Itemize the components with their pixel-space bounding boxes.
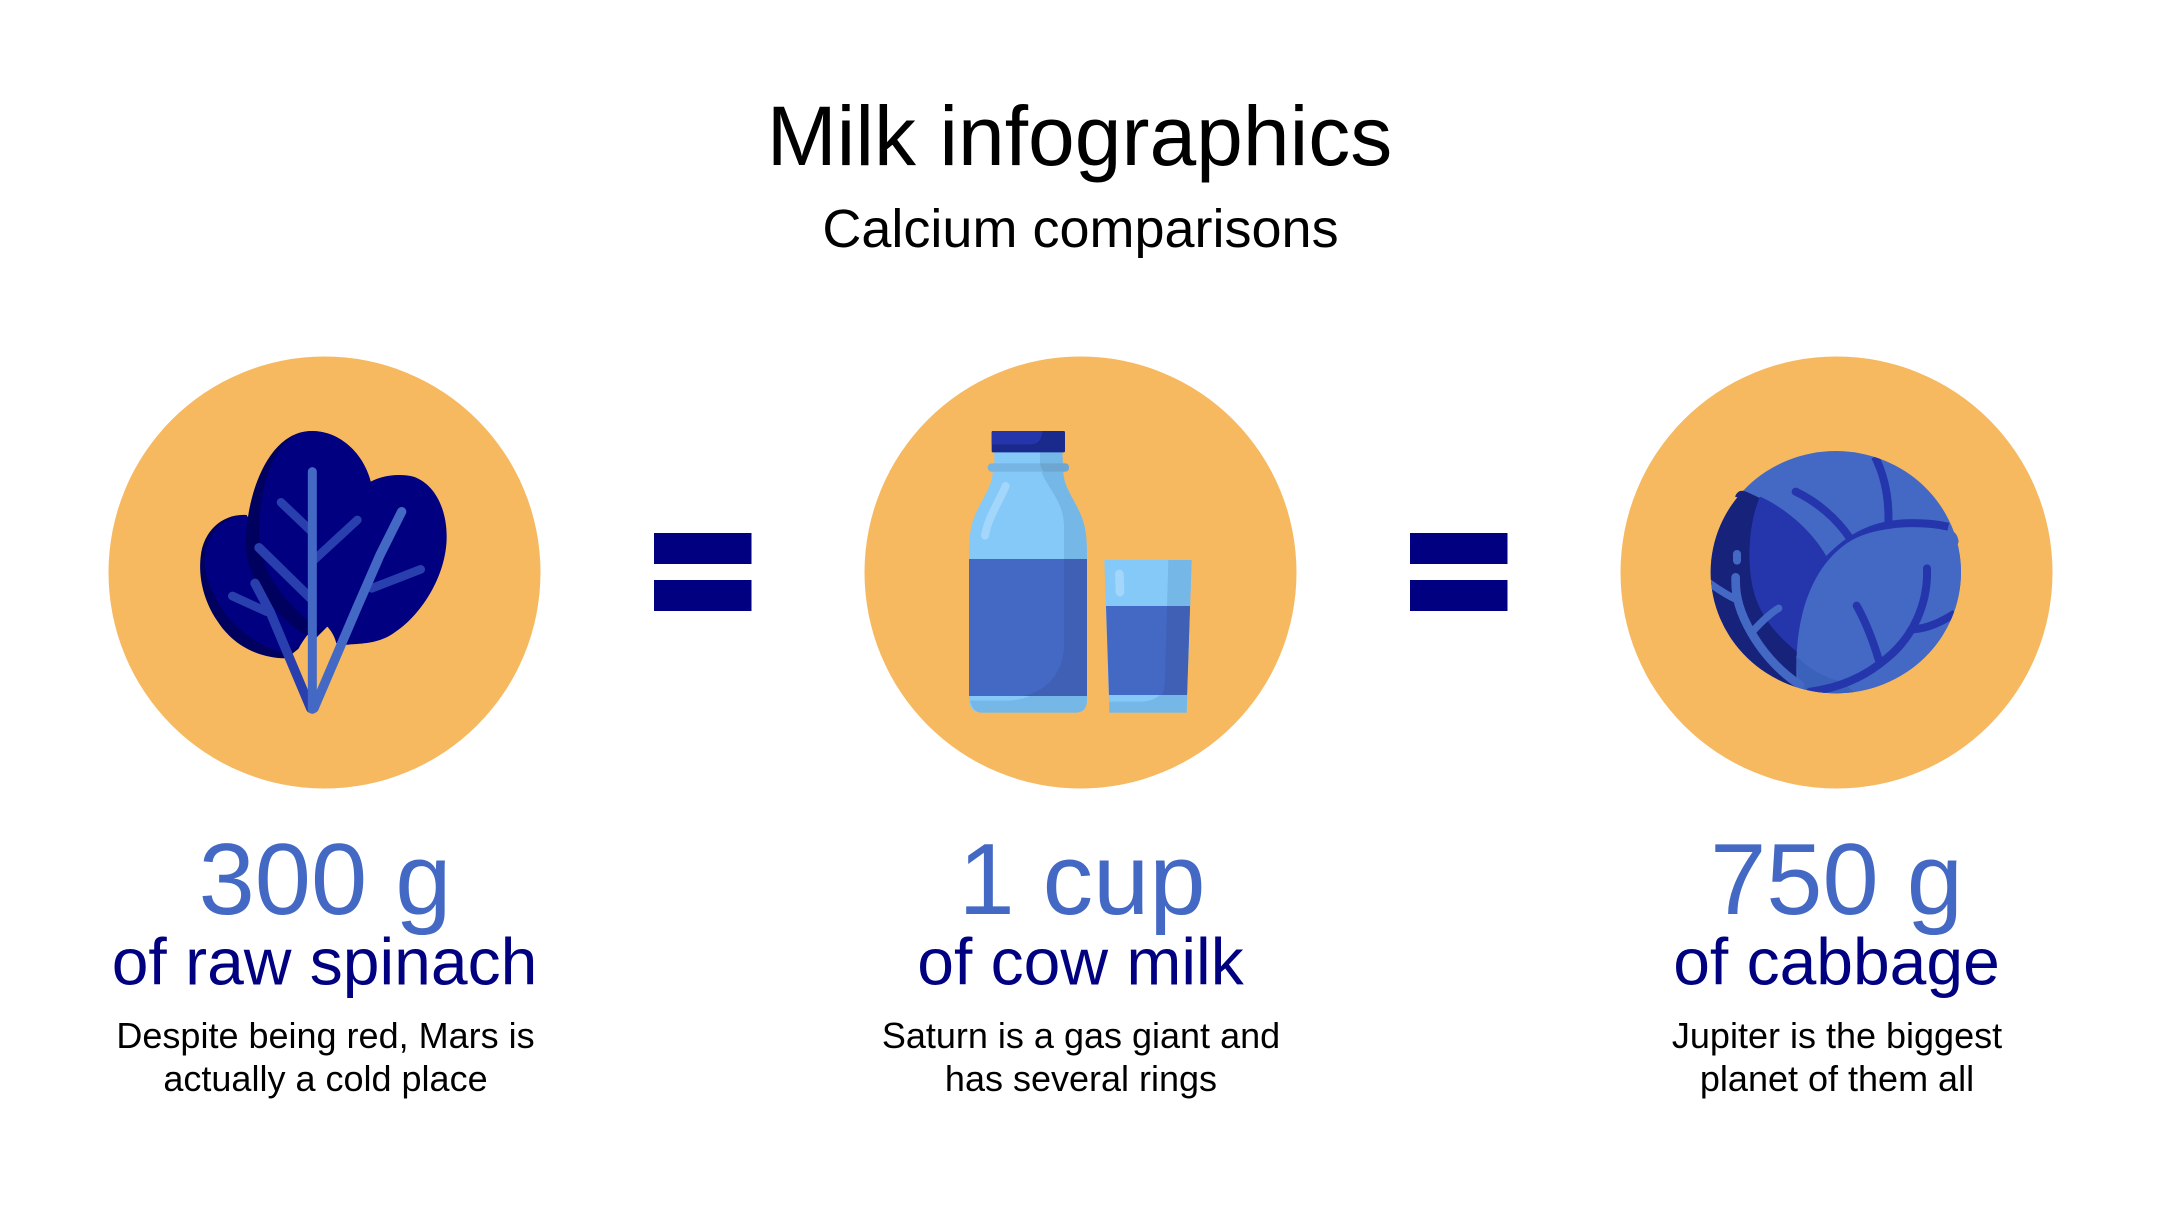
equals sign right <box>1410 533 1508 611</box>
description: milk: Saturn is a gas giant and <box>882 1015 1280 1056</box>
panel: cabbage <box>1620 356 2052 1099</box>
amount: 750 g: 750 g <box>1710 824 1963 936</box>
equals sign left <box>654 533 752 611</box>
subtitle: Calcium comparisons <box>822 199 1339 259</box>
description: spinach: Despite being red, Mars is <box>116 1015 535 1056</box>
icon: spinach leaves <box>200 431 447 709</box>
icon: milk glass <box>1104 560 1192 713</box>
label: of cabbage: of cabbage <box>1673 924 2000 998</box>
description: milk: has several rings <box>945 1058 1217 1099</box>
panel: spinach <box>108 356 540 1099</box>
icon: cabbage <box>1703 447 1967 697</box>
description: cabbage: Jupiter is the biggest <box>1672 1015 2002 1056</box>
label: of cow milk: of cow milk <box>917 924 1245 998</box>
milk background circle <box>864 356 1296 788</box>
spinach background circle <box>108 356 540 788</box>
icon: milk bottle <box>969 431 1087 713</box>
label: of raw spinach: of raw spinach <box>112 924 537 998</box>
description: spinach: actually a cold place <box>163 1058 488 1099</box>
panel: milk <box>864 356 1296 1099</box>
cabbage background circle <box>1620 356 2052 788</box>
description: cabbage: planet of them all <box>1700 1058 1974 1099</box>
amount: 1 cup: 1 cup <box>958 824 1206 936</box>
amount: 300 g: 300 g <box>199 824 451 936</box>
title: Milk infographics <box>767 89 1392 183</box>
